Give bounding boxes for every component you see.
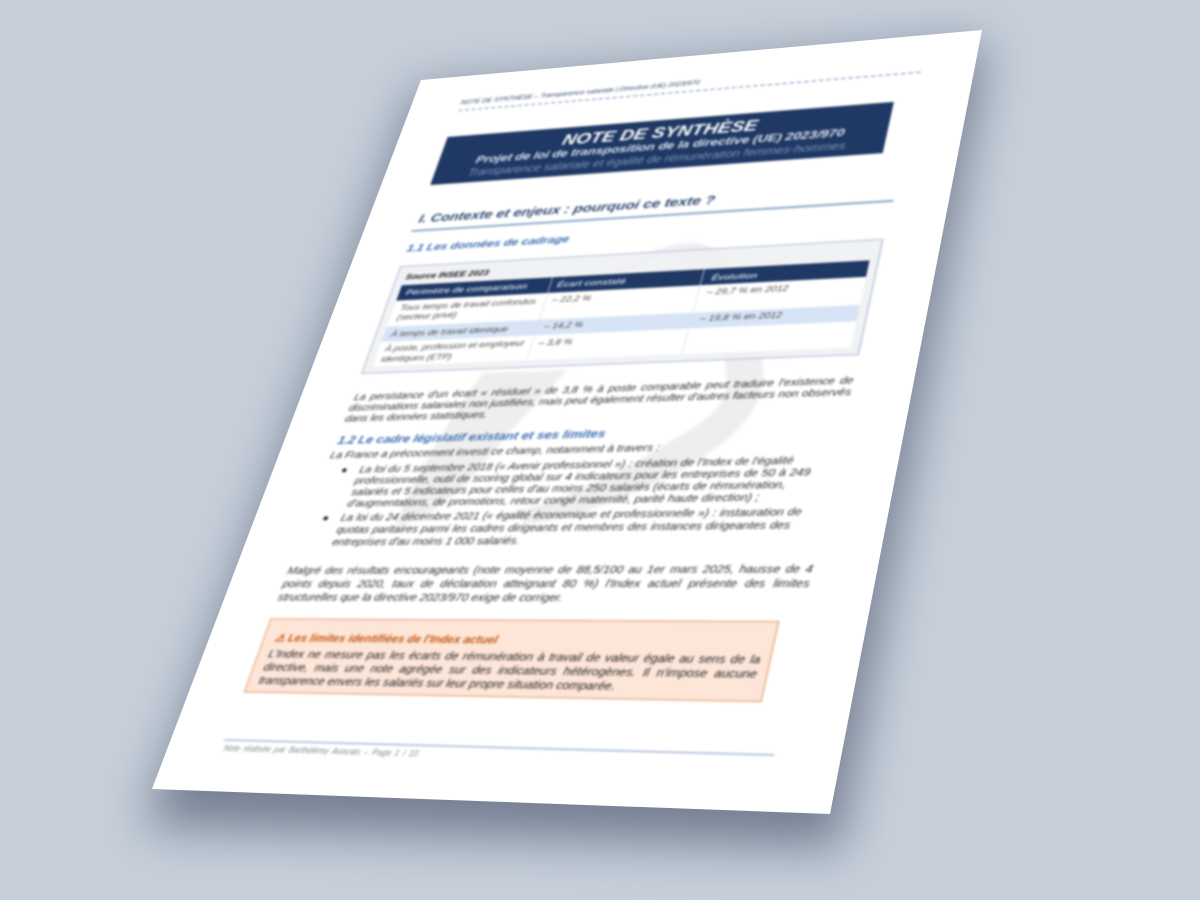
subheading 1.2: 1.2 Le cadre législatif existant et ses limites (336, 426, 608, 447)
bullet one: La loi du 5 septembre 2018 (« Avenir professionnel ») : création de l'Index de l'égalité (358, 455, 795, 475)
table caption: Source INSEE 2023 (404, 268, 491, 281)
column headers (404, 270, 759, 297)
row: à poste identique: À poste, profession et employeur (384, 338, 526, 353)
paragraph: résultats de l'index: structurelles que la directive 2023/970 exige de corriger. (276, 592, 564, 604)
intro line: La France a précocement investi ce champ, notamment à travers : (328, 443, 661, 461)
row: tous temps de travail: – 22,2 % (551, 293, 592, 304)
callout body (257, 648, 762, 693)
bullet two (322, 506, 803, 548)
row: tous temps de travail: Tous temps de travail confondus (399, 297, 538, 312)
paragraph: écart résiduel: discriminations salariales non justifiées, mais peut également résulter d'autres facteurs non observés (347, 387, 852, 413)
row: à temps de travail identique: À temps de travail identique (389, 324, 509, 339)
bullet two: La loi du 24 décembre 2021 (« égalité économique et professionnelle ») : instauration de (339, 506, 803, 523)
column headers: Évolution (710, 270, 759, 282)
row: à temps de travail identique: – 14,2 % (543, 320, 584, 331)
footer note: Note réalisée par Barthélémy Avocats – Page 1 / 10 (222, 744, 419, 758)
paragraph: résultats de l'index: Malgré des résultats encourageants (note moyenne de 88,5/100 au 1er mars 2025, hausse de 4 (286, 563, 814, 577)
paragraph: résultats de l'index: points depuis 2020, taux de déclaration atteignant 80 %) l'Index actuel présente des limites (281, 578, 811, 590)
row: à poste identique: identiques (ETP) (380, 352, 453, 364)
column headers: Écart constaté (556, 276, 627, 289)
data table panel (361, 239, 884, 374)
row: à poste identique: – 3,8 % (538, 337, 574, 347)
bullet one: salariés et 5 indicateurs pour celles d'au moins 250 salariés (écarts de rémunération, (350, 479, 787, 498)
subheading 1.1: 1.1 Les données de cadrage (405, 233, 571, 254)
row: tous temps de travail: (secteur privé) (395, 310, 458, 322)
data table (373, 260, 870, 366)
callout body: directive, mais une note agrégée sur des indicateurs hétérogènes. Il n'impose aucune (262, 662, 758, 681)
bullet list (322, 454, 812, 548)
paragraph: écart résiduel (343, 375, 855, 424)
paragraph: résultats de l'index (276, 563, 814, 605)
footer rule (224, 739, 774, 756)
row: tous temps de travail (395, 283, 790, 322)
paragraph: écart résiduel: La persistance d'un écart « résiduel » de 3,8 % à poste comparable peut traduire l'existence de (352, 375, 855, 403)
callout body: transparence envers les salariés sur leur propre situation comparée. (257, 675, 617, 693)
paragraph: écart résiduel: dans les données statistiques. (343, 410, 489, 424)
bullet one (340, 454, 812, 510)
bullet two: quotas paritaires parmi les cadres dirigeants et membres des instances dirigeantes des (335, 520, 791, 536)
bullet one: professionnelle, outil de scoring global sur 4 indicateurs pour les entreprises de 50 à 249 (353, 467, 812, 486)
callout title: ⚠ Les limites identifiées de l'Index actuel (273, 633, 499, 646)
row: tous temps de travail: – 29,7 % en 2012 (706, 283, 790, 297)
row: à poste identique (380, 337, 574, 364)
bullet two: entreprises d'au moins 1 000 salariés. (330, 535, 521, 548)
row: à temps de travail identique (389, 310, 784, 339)
tagline: Transparence salariale et égalité de rémunération femmes-hommes (466, 140, 847, 178)
bullet one: d'augmentations, de promotions, retour congé maternité, parité haute direction) ; (346, 492, 760, 509)
section heading: I. Contexte et enjeux : pourquoi ce texte ? (417, 193, 717, 225)
title banner (430, 102, 894, 185)
callout: limites de l'index (243, 618, 779, 702)
running header: NOTE DE SYNTHÈSE – Transparence salariale | Directive (UE) 2023/970 (460, 79, 701, 106)
main title: NOTE DE SYNTHÈSE (560, 117, 760, 148)
column headers: Périmètre de comparaison (404, 282, 529, 297)
callout body: L'Index ne mesure pas les écarts de rémunération à travail de valeur égale au sens de la (267, 648, 762, 667)
row: à temps de travail identique: – 19,8 % en 2012 (699, 310, 783, 323)
subtitle: Projet de loi de transposition de la directive (UE) 2023/970 (474, 126, 846, 165)
